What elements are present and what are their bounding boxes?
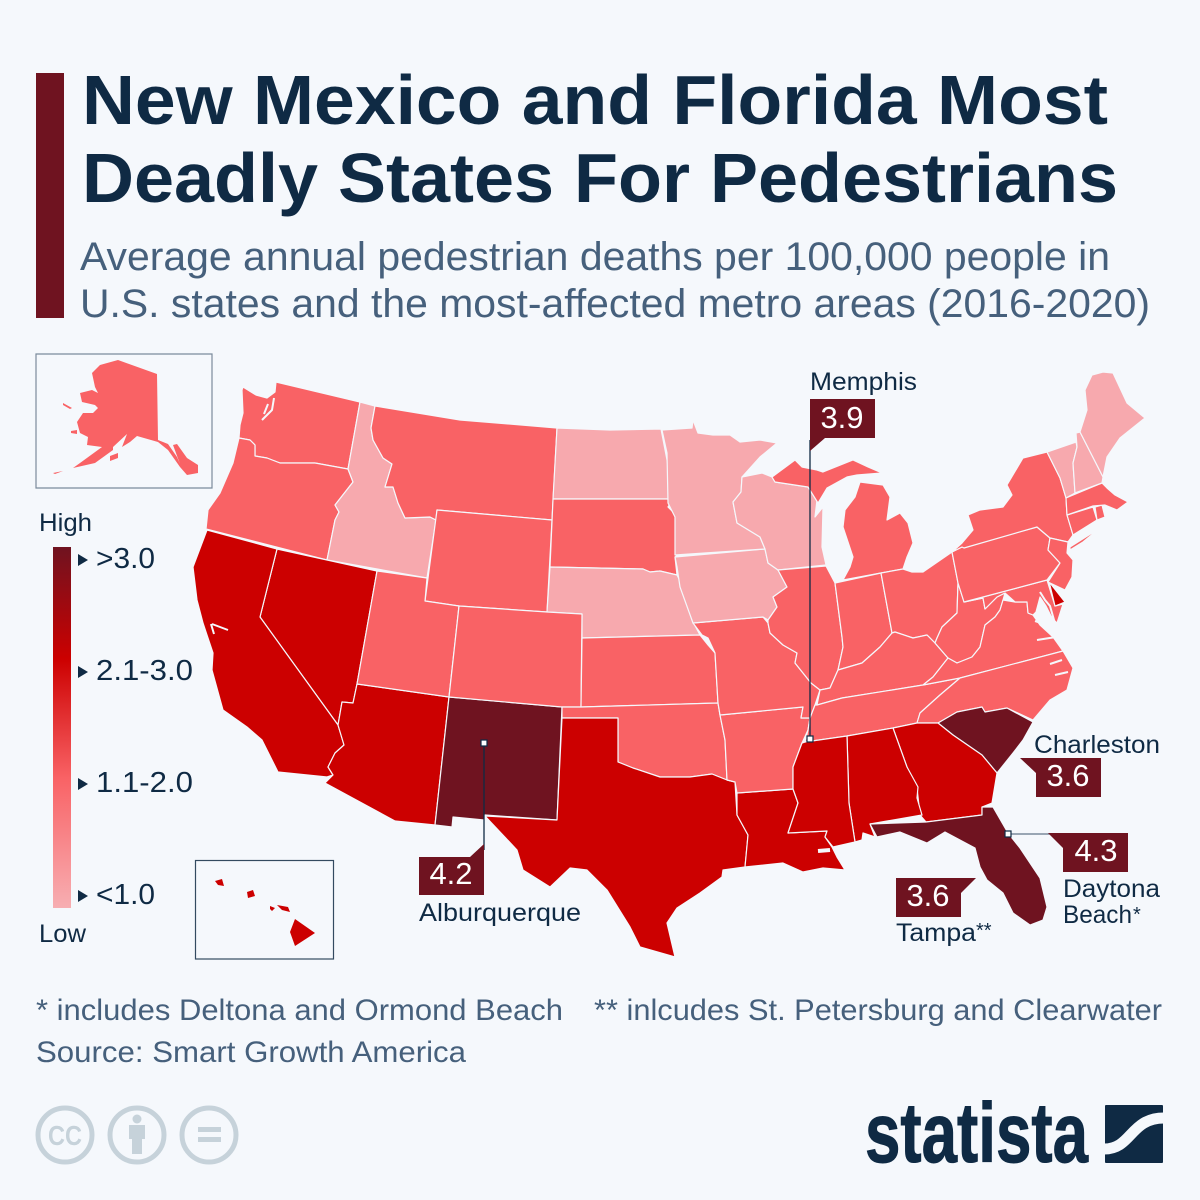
state: Mississippi [788, 736, 855, 847]
state: Indiana [835, 573, 892, 670]
state: Hawaii [215, 879, 315, 946]
callout: Daytona Beach: Daytona [1063, 875, 1160, 903]
callout: Charleston [1020, 731, 1160, 797]
legend [39, 509, 193, 948]
inset frame [196, 860, 334, 959]
legend label: High: High [39, 509, 92, 537]
state: Nevada [260, 549, 377, 725]
state: Colorado [449, 606, 582, 707]
state: Tennessee [805, 678, 960, 742]
callout: Daytona Beach [1005, 831, 1160, 929]
state: Ohio [881, 552, 958, 643]
callout: Charleston: 3.6 [1046, 758, 1090, 793]
Alaska inset [36, 354, 212, 488]
state: Minnesota [662, 420, 777, 555]
state: New York, Long Island [1070, 528, 1100, 550]
state: South Dakota [550, 499, 678, 575]
state: Washington [239, 382, 360, 469]
callout: Memphis: 3.9 [820, 400, 864, 435]
state: Missouri [693, 617, 820, 718]
state: New Mexico [435, 697, 562, 827]
state: Michigan upper peninsula [772, 460, 882, 503]
title: Deadly States For Pedestrians [82, 139, 1118, 217]
state: Oregon [206, 438, 353, 560]
state: Nebraska [547, 567, 700, 638]
title accent bar [36, 73, 64, 318]
state: Pennsylvania [952, 527, 1060, 602]
subtitle: Average annual pedestrian deaths per 100,000 people in [80, 235, 1110, 279]
state: Arizona [325, 684, 449, 825]
callout: Tampa: Tampa [896, 919, 976, 947]
logo wordmark: statista [865, 1086, 1089, 1180]
title [82, 61, 1118, 217]
state: Kansas [581, 635, 718, 707]
water details: Puget Sound, San Francisco Bay, Chesapeake Bay, Pamlico Sound, Lake Pontchartrain [211, 398, 1068, 851]
state: Idaho [327, 402, 436, 578]
footnotes and source: Source: Smart Growth America [36, 1036, 466, 1069]
state: Wisconsin [733, 473, 826, 570]
state: California [193, 530, 344, 777]
state: Connecticut [1067, 507, 1097, 535]
footnotes and source: ** inlcudes St. Petersburg and Clearwater [594, 994, 1162, 1027]
subtitle [80, 235, 1150, 326]
state: New Jersey [1048, 538, 1073, 590]
state: Maryland [964, 580, 1063, 623]
state: North Carolina [917, 651, 1073, 723]
legend values: 2.1-3.0 [96, 655, 193, 687]
state: Rhode Island [1095, 505, 1105, 520]
callout: Daytona Beach: 4.3 [1074, 833, 1118, 868]
callout: Tampa [896, 878, 992, 947]
state: Maine [1080, 372, 1145, 477]
state: Delaware [1048, 577, 1065, 606]
legend colour ramp [53, 547, 71, 908]
callout: Memphis: Memphis [810, 368, 917, 396]
state: Montana [371, 406, 557, 520]
legend label: Low: Low [39, 920, 87, 948]
legend ticks [78, 554, 88, 902]
callout: Daytona Beach: * [1133, 904, 1141, 926]
footnotes and source: * includes Deltona and Ormond Beach [36, 994, 563, 1027]
callout: Charleston: Charleston [1034, 731, 1160, 759]
state: Arkansas [720, 707, 810, 793]
state: Wyoming [425, 510, 552, 612]
state: New Hampshire [1073, 432, 1103, 493]
subtitle: U.S. states and the most-affected metro areas (2016-2020) [80, 282, 1150, 326]
icon: no derivatives [182, 1108, 236, 1162]
legend values: <1.0 [96, 879, 155, 911]
footnotes and source [36, 994, 1162, 1069]
legend values [96, 543, 193, 911]
state: Virginia [923, 600, 1063, 685]
callout: Alburquerque [419, 740, 581, 927]
state: West Virginia [935, 583, 1005, 663]
state: Utah [357, 571, 459, 697]
state: South Carolina [938, 707, 1033, 773]
state: Georgia [893, 723, 997, 822]
state: Alaska [73, 360, 198, 475]
icon: CC: CC [48, 1120, 82, 1151]
state: Illinois [768, 566, 843, 690]
logo mark [1104, 1105, 1164, 1163]
state: Massachusetts [1066, 483, 1128, 515]
callout: Daytona Beach: Beach [1063, 901, 1132, 929]
state: Iowa [675, 549, 787, 623]
callout: Tampa: ** [976, 920, 992, 942]
state: Michigan lower peninsula [843, 482, 913, 580]
state: North Dakota [553, 428, 673, 499]
inset frame [36, 354, 212, 488]
callout: Tampa: 3.6 [906, 878, 950, 913]
icon: CC [38, 1108, 92, 1162]
state: Florida [870, 807, 1047, 925]
callout: Alburquerque: 4.2 [429, 856, 473, 891]
state: Louisiana [737, 789, 845, 872]
legend values: 1.1-2.0 [96, 767, 193, 799]
Creative Commons icons [38, 1108, 236, 1162]
Statista logo [865, 1086, 1164, 1180]
map of the contiguous United States [193, 372, 1145, 957]
state: Texas [485, 718, 748, 957]
state: New York [952, 452, 1073, 552]
state: Vermont [1047, 442, 1077, 498]
state: Alabama [847, 728, 922, 842]
callout: Alburquerque: Alburquerque [419, 899, 581, 927]
state: Kentucky [817, 632, 948, 705]
icon: attribution person [110, 1108, 164, 1162]
title: New Mexico and Florida Most [82, 61, 1108, 139]
legend values: >3.0 [96, 543, 155, 575]
Hawaii inset [196, 860, 334, 959]
callout: Memphis [807, 368, 917, 742]
state: Oklahoma [562, 703, 727, 780]
